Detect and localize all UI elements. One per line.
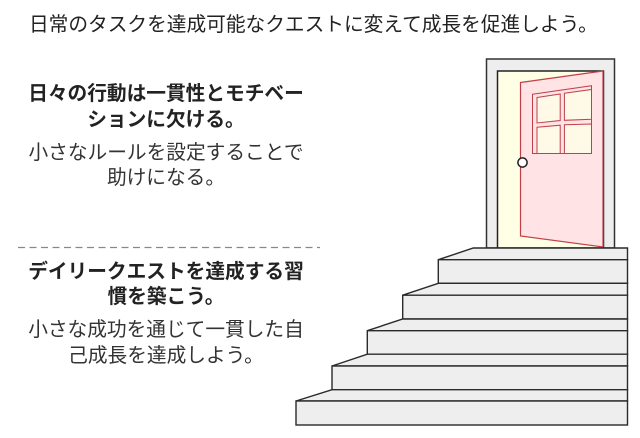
icon: staircase (296, 248, 628, 425)
title: 日常のタスクを達成可能なクエストに変えて成長を促進しよう。 (29, 14, 598, 36)
step 1 (438, 248, 628, 283)
door frame (486, 59, 614, 248)
text block: problem detail: 小さなルールを設定することで (28, 142, 304, 164)
icon: open door (486, 59, 614, 248)
heading: solution (28, 260, 304, 308)
heading: problem: 日々の行動は一貫性とモチベー (28, 83, 304, 105)
text block: solution detail (28, 319, 304, 367)
heading: problem: ションに欠ける。 (87, 108, 245, 131)
heading: solution: デイリークエストを達成する習 (28, 260, 304, 283)
step 2 (403, 283, 628, 319)
text block: problem detail (28, 142, 304, 189)
door leaf (520, 71, 603, 247)
text block: problem detail: 助けになる。 (107, 167, 225, 189)
heading: solution: 慣を築こう。 (108, 285, 224, 308)
panel: solution (28, 260, 304, 367)
door opening (498, 71, 604, 248)
step 3 (367, 319, 628, 354)
step 5 (296, 390, 628, 425)
door handle (518, 158, 527, 167)
step 4 (332, 354, 628, 390)
text block: solution detail: 己成長を達成しよう。 (68, 345, 264, 367)
heading: problem (28, 83, 304, 131)
text block: solution detail: 小さな成功を通じて一貫した自 (28, 319, 304, 341)
door window (532, 86, 592, 154)
panel: problem (28, 83, 304, 189)
